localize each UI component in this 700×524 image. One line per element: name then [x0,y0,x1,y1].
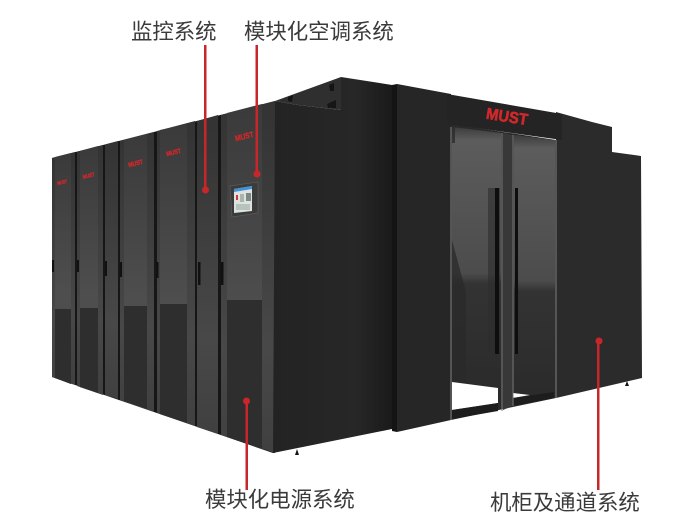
door handles [52,260,224,285]
cabinet door 3 [120,132,154,412]
feet [295,381,629,455]
cabinet door 4 [157,121,195,426]
callout: modular power system [205,398,355,512]
narrow cabinet strip 1 [105,141,118,399]
touch screen [230,182,258,217]
entrance column [392,84,451,432]
roof recess [275,77,341,110]
cabinet door 2 [77,145,103,395]
side wall left section [273,77,392,453]
thresholds [452,392,554,419]
right glass panel [514,135,555,395]
floor visible through door [452,382,530,410]
narrow cabinet strip 2 [197,115,218,434]
callout: monitoring system [131,20,217,194]
left glass panel [452,127,501,388]
callout: modular power system: 模块化电源系统 [205,488,355,512]
main logo: MUST [485,106,529,129]
cabinet logos: MUST [166,148,182,158]
callout: modular air conditioning system [244,20,394,178]
centre post [503,133,512,410]
cabinet door 5 [221,101,275,453]
callout: monitoring system: 监控系统 [131,20,217,44]
inner reflection [452,127,466,384]
cabinet logos: MUST [57,179,68,187]
cabinet logos: MUST [82,172,96,181]
glass door entrance [447,94,562,420]
door handles [488,188,518,354]
cabinet logos [57,130,255,187]
cabinet door 1 [52,152,75,385]
door frames [451,127,556,420]
door header [447,94,562,140]
cabinet logos: MUST [234,130,255,143]
right face: enclosure side [273,77,642,455]
callout: modular air conditioning system: 模块化空调系统 [244,20,394,44]
far-right wall [556,112,642,398]
left face: cabinet row [52,101,275,453]
callout: cabinet and aisle system [490,338,640,515]
callout: cabinet and aisle system: 机柜及通道系统 [490,491,640,515]
door opening background [451,124,556,420]
cabinet logos: MUST [128,159,144,169]
